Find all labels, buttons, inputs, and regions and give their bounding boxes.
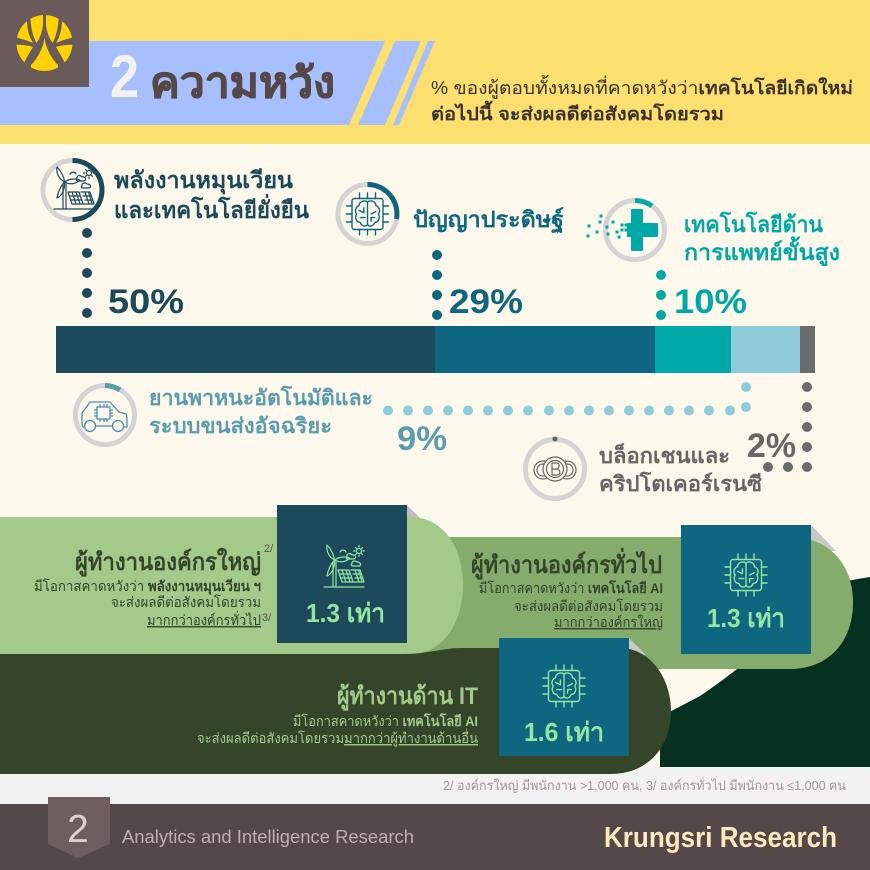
- icon: solar and wind: [324, 545, 364, 587]
- panel text: จะส่งผลดีต่อสังคมโดยรวม: [111, 594, 261, 610]
- label: ยานพาหนะอัตโนมัติและ: [149, 385, 373, 410]
- panel text: มากกว่าองค์กรทั่วไป: [147, 611, 261, 628]
- category: AI 29%: [338, 184, 564, 321]
- footer bar: [0, 804, 870, 870]
- panel text: จะส่งผลดีต่อสังคมโดยรวมมากกว่าผู้ทำงานด้านอื่น: [197, 729, 478, 747]
- page number badge: 2: [67, 808, 89, 851]
- label: [684, 211, 840, 267]
- panel shape: [380, 537, 853, 669]
- label: พลังงานหมุนเวียน: [114, 167, 293, 195]
- panel: IT workers: [0, 638, 671, 774]
- header description: [431, 75, 853, 124]
- footnote: 2/ องค์กรใหญ่ มีพนักงาน >1,000 คน, 3/ องค์กรทั่วไป มีพนักงาน ≤1,000 คน: [443, 777, 846, 793]
- category: autonomous vehicles 9%: [76, 382, 751, 458]
- label: ปัญญาประดิษฐ์: [413, 207, 564, 234]
- stat card: 1.3 เท่า: [306, 598, 385, 628]
- panel text: มีโอกาสคาดหวังว่า เทคโนโลยี AI: [479, 579, 663, 596]
- panel text: ผู้ทำงานองค์กรทั่วไป: [471, 547, 662, 580]
- value: 50%: [108, 283, 184, 321]
- leader dots: [763, 382, 812, 472]
- panel shape: [0, 648, 671, 774]
- page number badge: [48, 797, 110, 858]
- label: [114, 167, 309, 223]
- label: คริปโตเคอร์เรนซี: [599, 471, 762, 496]
- icon: brain chip: [543, 665, 585, 707]
- panel text: ผู้ทำงานองค์กรใหญ่: [75, 547, 261, 577]
- panel text: 3/: [262, 612, 272, 624]
- panel text: ผู้ทำงานด้าน IT: [337, 683, 478, 711]
- category: renewable energy 50%: [43, 160, 309, 321]
- value: 9%: [397, 420, 447, 458]
- title: heading: ความหวัง: [150, 59, 335, 106]
- logo: Krungsri emblem: [0, 0, 89, 87]
- icon: brain chip: [725, 554, 767, 596]
- value: 10%: [674, 283, 747, 321]
- footer: brand: Krungsri Research: [604, 822, 837, 854]
- stat card: [499, 638, 629, 756]
- page fold: [629, 638, 646, 655]
- icon: smart car: [76, 386, 134, 444]
- footer strip background: [0, 767, 870, 805]
- leader dots: [383, 382, 751, 416]
- stacked bar chart: [56, 326, 815, 373]
- panel text: มีโอกาสคาดหวังว่า พลังงานหมุนเวียน ฯ: [34, 578, 261, 595]
- panel text: [471, 547, 663, 630]
- panel text: มากกว่าองค์กรใหญ่: [554, 614, 663, 630]
- label: และเทคโนโลยียั่งยืน: [114, 193, 309, 223]
- icon: solar and wind: [43, 160, 102, 220]
- header: yellow band: [0, 0, 870, 144]
- header description: % ของผู้ตอบทั้งหมดที่คาดหวังว่า เทคโนโลยีเกิดใหม่: [431, 75, 853, 99]
- leader dots: [432, 250, 442, 320]
- stat card: [277, 505, 407, 643]
- category: medical technology 10%: [586, 200, 840, 321]
- decorative dark green shape: [660, 577, 870, 767]
- footer: department name: Analytics and Intelligence Research: [122, 827, 414, 847]
- stat card: 1.6 เท่า: [524, 717, 604, 747]
- panel text: [34, 543, 274, 628]
- icon: brain chip: [338, 184, 397, 244]
- page fold: [811, 525, 836, 551]
- label: เทคโนโลยีด้าน: [684, 211, 823, 237]
- leader dots: [656, 270, 666, 320]
- icon: coins: [526, 436, 584, 498]
- label: [599, 442, 762, 496]
- value: 2%: [747, 427, 796, 465]
- panel text: มีโอกาสคาดหวังว่า เทคโนโลยี AI: [293, 712, 478, 729]
- category: blockchain 2%: [526, 382, 812, 498]
- label: การแพทย์ขั้นสูง: [684, 236, 840, 267]
- panel text: [197, 683, 478, 747]
- title: section number: 2: [110, 43, 139, 110]
- stat card: [681, 525, 811, 654]
- label: บล็อกเชนและ: [599, 442, 730, 468]
- label: [149, 385, 373, 438]
- panel: large organisation workers: [0, 505, 463, 654]
- value: 29%: [449, 283, 523, 321]
- panel text: 2/: [264, 543, 274, 555]
- panel: general organisation workers: [380, 525, 853, 669]
- header description: ต่อไปนี้ จะส่งผลดีต่อสังคมโดยรวม: [431, 100, 724, 124]
- icon: medical cross: [586, 200, 664, 260]
- label: ระบบขนส่งอัจฉริยะ: [149, 415, 332, 438]
- panel text: จะส่งผลดีต่อสังคมโดยรวม: [514, 598, 663, 614]
- header: blue title ribbon: [0, 41, 435, 125]
- page fold: [407, 505, 423, 521]
- leader dots: [82, 228, 92, 318]
- panel shape: [0, 517, 463, 654]
- stat card: 1.3 เท่า: [707, 603, 785, 633]
